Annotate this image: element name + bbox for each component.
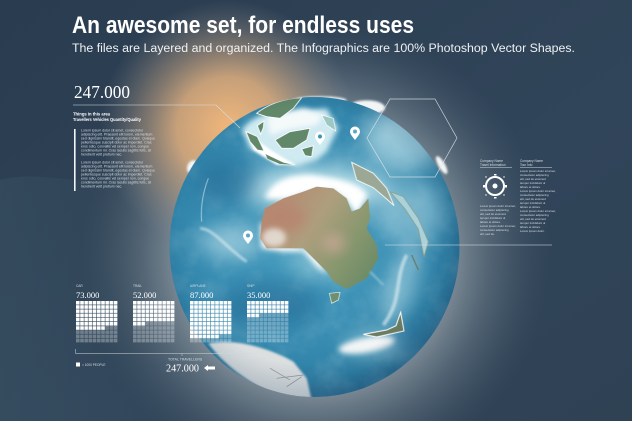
- left heading: Travellers Vehicles Quantity/Quality: [73, 117, 142, 122]
- chart: ship: SHIP: [247, 284, 254, 288]
- left text block: eros odio, convallis vel semper non, congue: [81, 176, 149, 180]
- map pin 3: [350, 127, 360, 140]
- chart: ship: 35.000: [247, 290, 270, 300]
- left heading: [73, 112, 142, 122]
- right text column 1: Lorem ipsum dolor sit amet,: [480, 204, 516, 208]
- total travellers: TOTAL TRAVELLERS: [168, 358, 203, 362]
- right panel column 2 heading: Tour Info: [520, 163, 533, 167]
- left text block: hendrerit velit pretium nec.: [81, 184, 122, 188]
- white belt north of Australia: [265, 175, 367, 216]
- right text column 1: [480, 204, 516, 236]
- right text column 2: Lorem ipsum dolor.: [520, 229, 545, 233]
- total bracket: [76, 349, 257, 356]
- right text column 1: elit, sed do eiusmod: [480, 212, 506, 216]
- left text block: adipiscing elit. Praesent elit lorem, elementum: [81, 132, 152, 136]
- chart: airplane: AIRPLANE: [190, 284, 206, 288]
- right text column 1: consectetur adipiscing: [480, 208, 509, 212]
- globe: [165, 95, 465, 400]
- right panel column 1 heading: [480, 159, 512, 168]
- right text column 2: consectetur adipiscing: [520, 173, 549, 177]
- left text block: sed dignissim blandit, egestas et diam. Quisque: [81, 136, 155, 140]
- chart: car: [76, 284, 118, 343]
- right text column 2: Lorem ipsum dolor sit amet,: [520, 189, 556, 193]
- land: New Guinea and island arc: [352, 162, 394, 206]
- left stat and callout line: [73, 82, 240, 128]
- right text column 2: Lorem ipsum dolor sit amet,: [520, 169, 556, 173]
- right rule: [385, 244, 552, 246]
- left text block: Lorem ipsum dolor sit amet, consectetur: [81, 128, 144, 132]
- right text column 1: elit, sed do.: [480, 232, 495, 236]
- land: Australia: [260, 187, 378, 289]
- land: Southeast Asia islands: [246, 98, 313, 165]
- right text column 1: consectetur adipiscing: [480, 228, 509, 232]
- left text block: Lorem ipsum dolor sit amet, consectetur: [81, 160, 144, 164]
- right text column 2: labore et dolore.: [520, 225, 541, 229]
- right text column 2: tempor incididunt ut: [520, 201, 545, 205]
- chart: airplane: [190, 284, 232, 343]
- right text column 2: labore et dolore.: [520, 185, 541, 189]
- right text column 1: labore et dolore.: [480, 220, 501, 224]
- right text column 1: Lorem ipsum dolor sit amet,: [480, 224, 516, 228]
- right text column 2: consectetur adipiscing: [520, 213, 549, 217]
- subtitle: The files are Layered and organized. The Infographics are 100% Photoshop Vector Shapes.: [72, 43, 575, 55]
- right text column 2: tempor incididunt ut: [520, 221, 545, 225]
- legend: = 1000 PEOPLE: [82, 363, 105, 367]
- right text column 2: [520, 169, 556, 233]
- chart: car: CAR: [76, 284, 83, 288]
- left text block: [74, 128, 155, 191]
- right text column 2: Lorem ipsum dolor sit amet,: [520, 209, 556, 213]
- white halo along south coast: [260, 222, 327, 275]
- right panel column 1 heading: Travel Information: [480, 163, 506, 167]
- right text column 2: tempor incididunt ut: [520, 181, 545, 185]
- northern shelf: [242, 108, 338, 167]
- arrow: [204, 365, 215, 371]
- hexagon callout: [367, 99, 457, 177]
- land: Tasmania: [329, 292, 340, 303]
- clouds beyond globe rim: [185, 96, 450, 175]
- right panel column 1 heading: Company Name: [480, 159, 503, 163]
- land: New Zealand: [337, 333, 396, 357]
- land: Antarctica: [208, 342, 312, 400]
- chart: car: 73.000: [76, 290, 99, 300]
- map pin 2: [315, 132, 325, 145]
- left text block: sed dignissim blandit, egestas et diam. Quisque: [81, 168, 155, 172]
- right panel column 2 heading: Company Name: [520, 159, 543, 163]
- total travellers: 247.000: [166, 362, 199, 374]
- left text block: condimentum mi. Cras iaculis sagittis felis, sit: [81, 148, 151, 152]
- right text column 2: consectetur adipiscing: [520, 193, 549, 197]
- map pin 1: [243, 231, 253, 244]
- chart: train: [133, 284, 175, 343]
- right text column 1: tempor incididunt ut: [480, 216, 505, 220]
- chart: train: 52.000: [133, 290, 156, 300]
- left stat and callout line: 247.000: [74, 82, 130, 102]
- cloud streaks: [200, 178, 407, 325]
- left text block: adipiscing elit. Praesent elit lorem, elementum: [81, 164, 152, 168]
- right text column 2: elit, sed do eiusmod: [520, 217, 546, 221]
- title: An awesome set, for endless uses: [72, 12, 414, 39]
- right text column 2: elit, sed do eiusmod: [520, 197, 546, 201]
- left text block: eros odio, convallis vel semper non, congue: [81, 144, 149, 148]
- chart: ship: [247, 284, 289, 343]
- total travellers: [166, 358, 203, 374]
- icon: compass target: [483, 174, 507, 198]
- right text column 2: elit, sed do eiusmod: [520, 177, 546, 181]
- left text block: pellentesque suscipit dolor ac imperdiet. Cras: [81, 140, 152, 144]
- left heading: Things in this area: [73, 112, 111, 116]
- left text block: condimentum mi. Cras iaculis sagittis felis, sit: [81, 180, 151, 184]
- chart: train: TRAIL: [133, 284, 142, 288]
- dark ocean patches: [195, 158, 443, 358]
- pale shelf seas: [200, 107, 443, 355]
- right text column 2: labore et dolore.: [520, 205, 541, 209]
- chart: airplane: 87.000: [190, 290, 213, 300]
- left text block: hendrerit velit pretium nec.: [81, 152, 122, 156]
- right panel column 2 heading: [520, 159, 552, 168]
- left text block: pellentesque suscipit dolor ac imperdiet. Cras: [81, 172, 152, 176]
